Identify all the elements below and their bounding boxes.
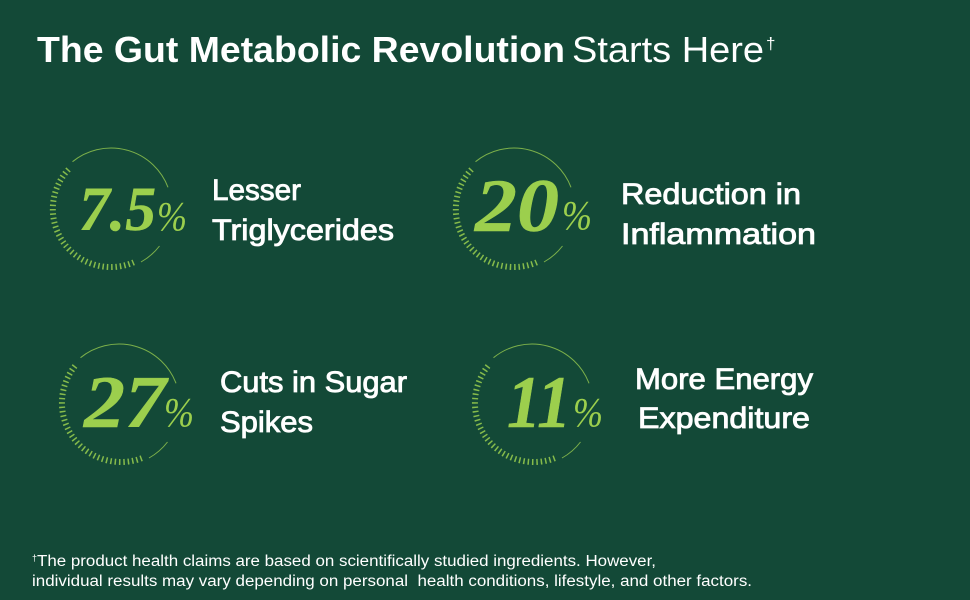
percent sign: % bbox=[157, 193, 187, 239]
label: Reduction in bbox=[621, 178, 801, 211]
gauge ring bbox=[62, 344, 176, 462]
value: 7.5 bbox=[79, 176, 156, 244]
footnote: † bbox=[32, 553, 37, 563]
stat: 27% cuts in sugar spikes bbox=[62, 344, 407, 462]
footnote bbox=[32, 553, 752, 590]
gauge ring bbox=[475, 344, 589, 462]
label: Lesser bbox=[212, 174, 301, 207]
label line 2: Spikes bbox=[220, 406, 313, 439]
stat: 20% reduction in inflammation bbox=[456, 148, 816, 267]
stat: 7.5% lesser triglycerides bbox=[53, 148, 394, 267]
stat: 11% more energy expenditure bbox=[475, 344, 813, 462]
title bbox=[37, 29, 775, 70]
title: The Gut Metabolic Revolution bbox=[37, 29, 565, 70]
percent sign: % bbox=[573, 389, 603, 435]
label line 2: Triglycerides bbox=[212, 214, 394, 247]
gauge ring bbox=[456, 148, 571, 267]
label: More Energy bbox=[635, 363, 813, 396]
title: † bbox=[766, 34, 775, 53]
label: Cuts in Sugar bbox=[220, 366, 407, 399]
value: 11 bbox=[507, 362, 571, 444]
label line 2: Expenditure bbox=[638, 402, 810, 435]
value: 20 bbox=[474, 165, 559, 248]
value: 27 bbox=[83, 362, 169, 444]
percent sign: % bbox=[562, 192, 592, 238]
label line 2: Inflammation bbox=[621, 218, 816, 251]
title: Starts Here bbox=[572, 29, 764, 70]
footnote: The product health claims are based on scientifically studied ingredients. However, bbox=[37, 553, 656, 570]
percent sign: % bbox=[164, 389, 194, 435]
gauge ring bbox=[53, 148, 168, 267]
footnote: individual results may vary depending on personal health conditions, lifestyle, and other factors. bbox=[32, 573, 752, 590]
